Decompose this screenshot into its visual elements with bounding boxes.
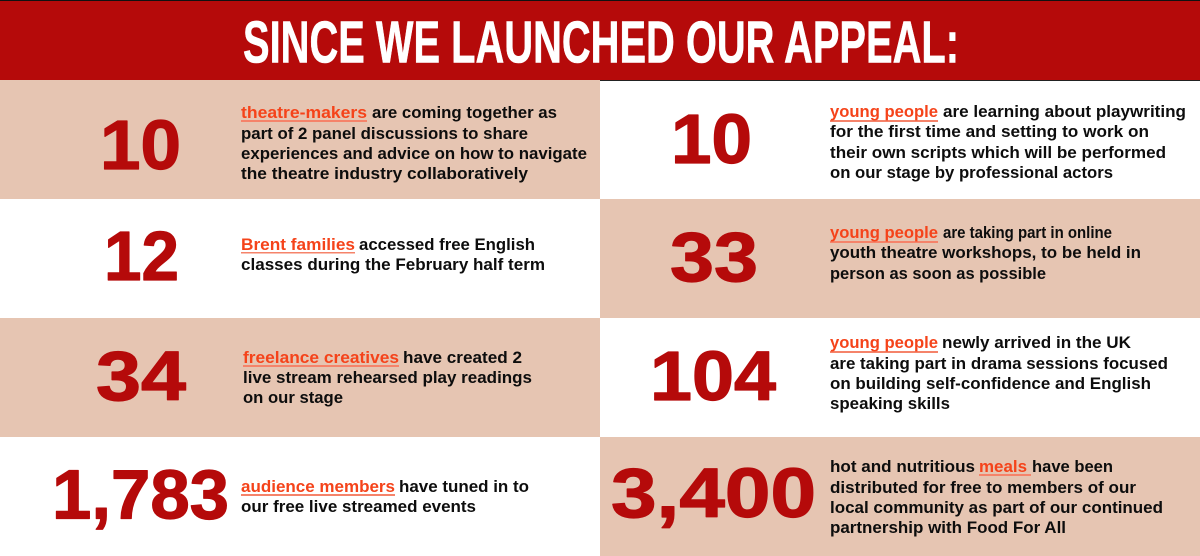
number: 104: 104 [650, 337, 776, 415]
text: young people drama sessions: newly arrived in the UK [942, 333, 1132, 352]
text: young people online workshops: are taking part in online [943, 223, 1112, 242]
text: audience members [241, 477, 529, 516]
text: freelance creatives: have created 2 [403, 348, 522, 367]
panel: Brent families [0, 199, 600, 318]
text: theatre-makers: the theatre industry collaboratively [241, 164, 529, 183]
panel: young people online workshops [600, 199, 1200, 318]
text: young people playwriting: for the first time and setting to work on [830, 122, 1149, 141]
text: young people playwriting: on our stage by professional actors [830, 163, 1113, 182]
text: freelance creatives: freelance creatives [243, 348, 399, 367]
text: young people drama sessions: speaking skills [830, 394, 950, 413]
panel: young people playwriting [600, 81, 1200, 199]
text: young people drama sessions: young people [830, 333, 938, 352]
text: young people playwriting: their own scripts which will be performed [830, 143, 1166, 162]
text: Brent families: classes during the February half term [241, 255, 545, 274]
panel: meals [600, 437, 1200, 556]
text: theatre-makers [241, 103, 587, 183]
number: 33: 33 [670, 218, 758, 296]
header banner [0, 0, 1200, 81]
number: 1,783: 1,783 [52, 456, 229, 534]
text: young people drama sessions: on building self-confidence and English [830, 374, 1151, 393]
panel: audience members [0, 437, 600, 556]
text: young people online workshops: young people [830, 223, 938, 242]
text: Brent families [241, 235, 545, 274]
number: 3,400: 3,400 [611, 454, 816, 532]
text: young people drama sessions: are taking part in drama sessions focused [830, 354, 1168, 373]
text: freelance creatives [243, 348, 532, 407]
text: young people drama sessions [830, 333, 1168, 413]
text: meals [830, 457, 1163, 537]
panel: theatre-makers [0, 80, 600, 199]
text: audience members: our free live streamed events [241, 497, 476, 516]
text: young people online workshops [830, 223, 1141, 283]
text: meals: local community as part of our continued [830, 498, 1163, 517]
number: 34: 34 [96, 337, 186, 415]
text: meals: partnership with Food For All [830, 518, 1066, 537]
text: Brent families: accessed free English [359, 235, 535, 254]
text: meals: hot and nutritious [830, 457, 975, 476]
number: 10: 10 [100, 106, 181, 184]
text: theatre-makers: are coming together as [372, 103, 557, 122]
text: theatre-makers: part of 2 panel discussions to share [241, 124, 528, 143]
text: meals: meals [979, 457, 1027, 476]
text: meals: have been [1032, 457, 1113, 476]
text: young people online workshops: person as soon as possible [830, 264, 1046, 283]
text: young people playwriting [830, 102, 1186, 182]
text: young people playwriting: young people [830, 102, 938, 121]
text: audience members: have tuned in to [399, 477, 529, 496]
text: theatre-makers: experiences and advice on how to navigate [241, 144, 587, 163]
text: young people playwriting: are learning about playwriting [943, 102, 1186, 121]
text: young people online workshops: youth theatre workshops, to be held in [830, 243, 1141, 262]
text: meals: distributed for free to members of our [830, 478, 1136, 497]
text: audience members: audience members [241, 477, 395, 496]
text: theatre-makers: theatre-makers [241, 103, 367, 122]
text: freelance creatives: on our stage [243, 388, 343, 407]
panel: freelance creatives [0, 318, 600, 437]
number: 12: 12 [104, 217, 179, 295]
number: 10: 10 [671, 100, 752, 178]
text: Brent families: Brent families [241, 235, 355, 254]
text: freelance creatives: live stream rehearsed play readings [243, 368, 532, 387]
panel: young people drama sessions [600, 318, 1200, 437]
